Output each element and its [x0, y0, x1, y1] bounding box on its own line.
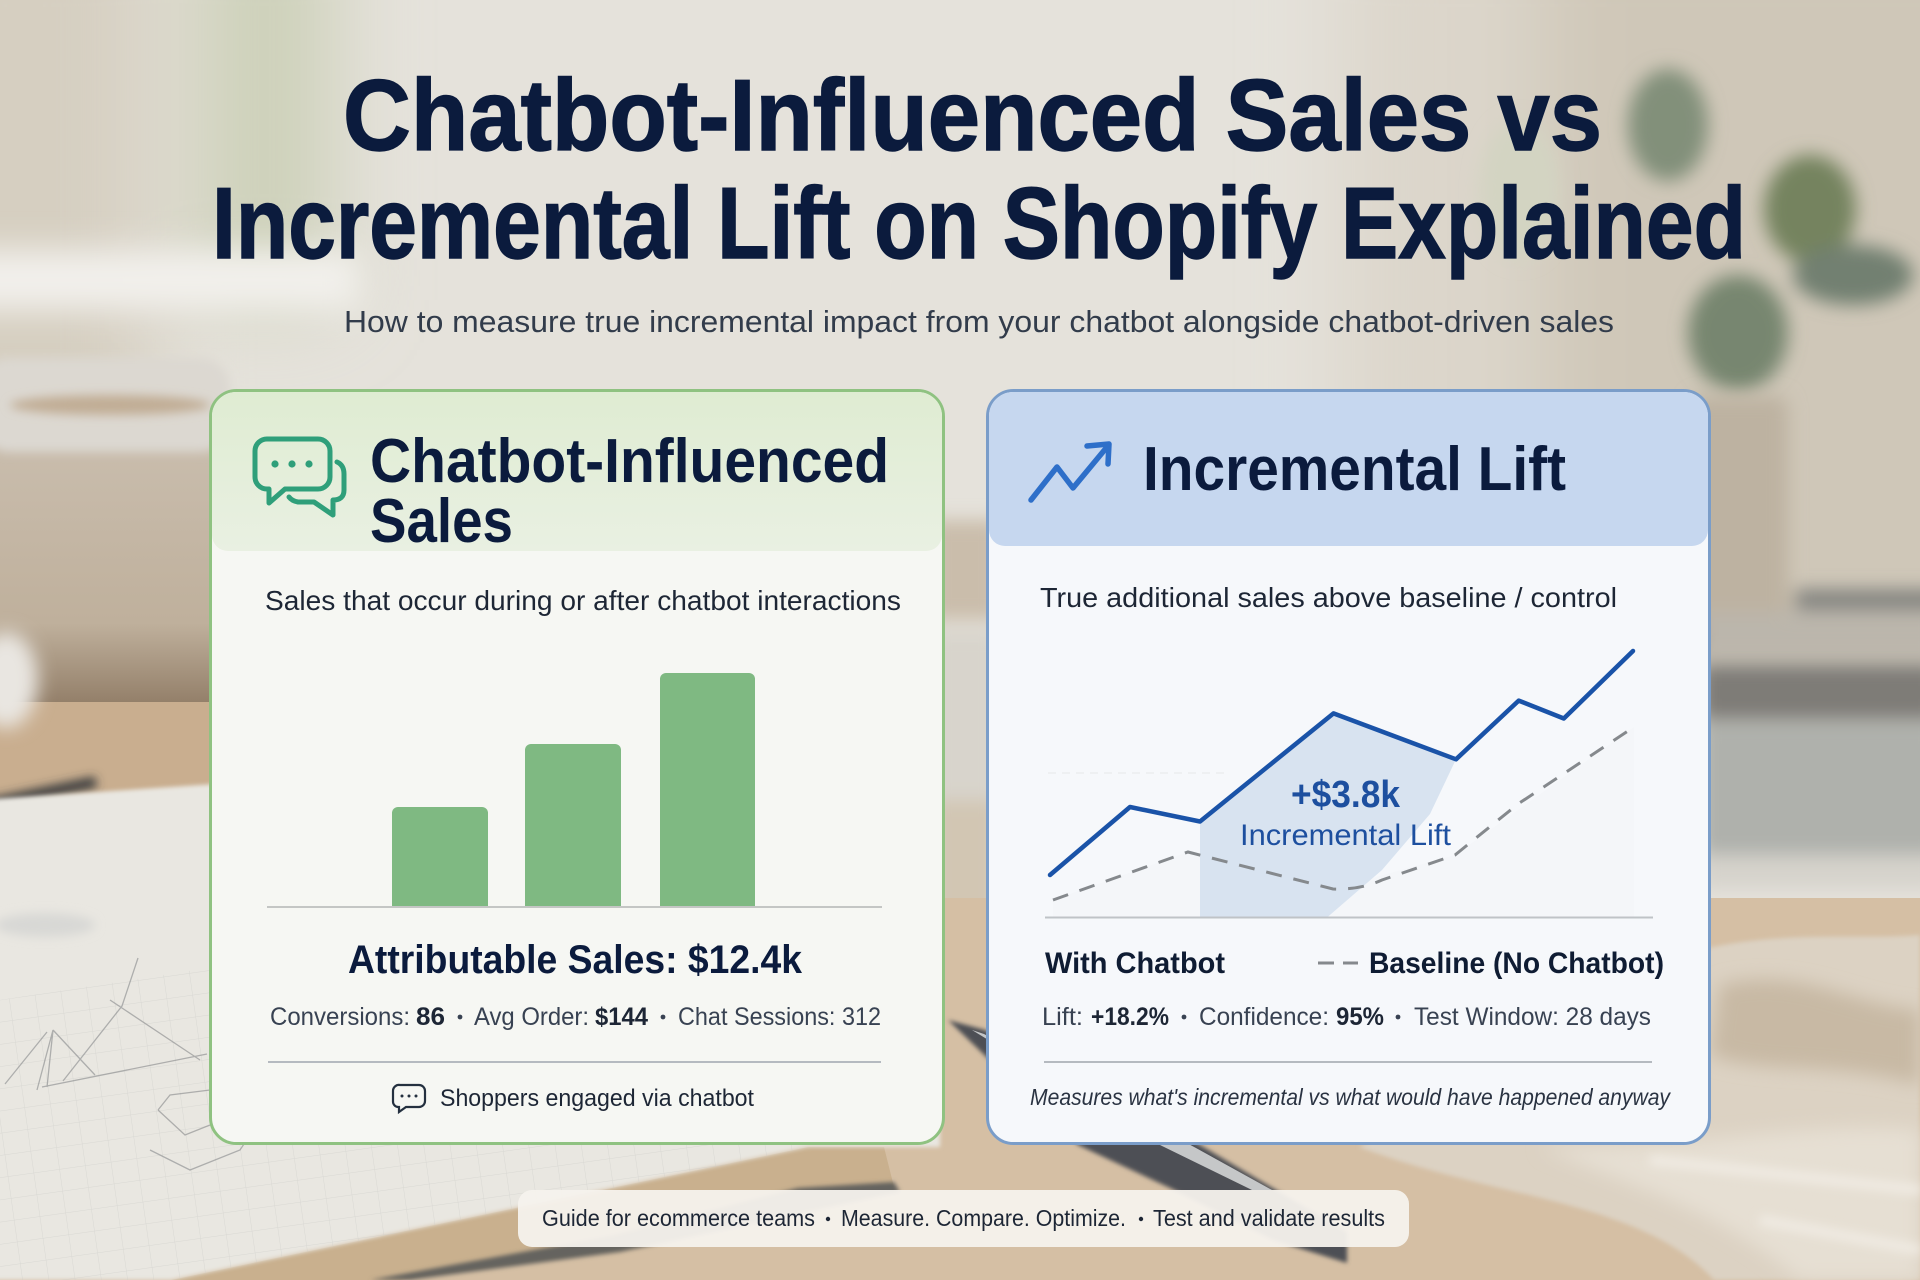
italic footnote: Measures what's incremental vs what would have happened anyway [1030, 1084, 1671, 1110]
stats row: Chat Sessions: 312 [678, 1003, 881, 1031]
bright window glare band [0, 250, 360, 310]
pill text: Guide for ecommerce teams [542, 1205, 815, 1231]
stats row [1042, 1003, 1651, 1031]
stats row: Lift: [1042, 1003, 1083, 1031]
pill text [542, 1205, 1385, 1231]
notebook sketch lines [5, 958, 260, 1170]
lift value label: +$3.8k [1291, 774, 1401, 816]
stats row: 86 [416, 1003, 445, 1031]
linen cloth [1359, 935, 1920, 1280]
icon: trending arrow [1031, 444, 1109, 500]
panel card [988, 390, 1710, 1144]
panel heading: Sales [370, 487, 513, 556]
wall light bands [0, 0, 1920, 700]
bar chart [267, 673, 882, 907]
desk surface [0, 898, 1920, 1280]
with chatbot line [1050, 651, 1633, 875]
panel description: True additional sales above baseline / control [1040, 582, 1617, 613]
lift caption: Incremental Lift [1240, 819, 1452, 852]
panel heading: Incremental Lift [1143, 435, 1566, 504]
panel header band [989, 392, 1708, 546]
icon: blurred coffee cup [0, 358, 230, 728]
baseline dashed line [1053, 727, 1634, 900]
notebook pages [0, 783, 940, 1280]
panel header band [212, 392, 942, 551]
title [212, 60, 1746, 280]
pot, laptop and desk bands [1690, 396, 1920, 889]
pill text: Test and validate results [1153, 1205, 1385, 1231]
legend: With Chatbot [1045, 947, 1225, 980]
panel: chatbot-influenced sales [210, 390, 944, 1144]
metric: attributable sales: Attributable Sales: $12.4k [348, 938, 803, 982]
panel heading [370, 427, 889, 556]
incremental lift area [1200, 713, 1456, 918]
axis [1045, 916, 1653, 918]
panel heading: Chatbot-Influenced [370, 427, 889, 496]
stats row: Test Window: 28 days [1414, 1003, 1651, 1031]
stats row: Conversions: [270, 1003, 410, 1031]
legend [1045, 947, 1664, 980]
faint chart underlay [1053, 727, 1634, 917]
gap tones between panels [930, 520, 1000, 920]
footer pill [518, 1190, 1409, 1247]
pen behind the panels [948, 1020, 1347, 1263]
stats row [270, 1003, 881, 1031]
stats row: $144 [595, 1003, 648, 1031]
stats row: Confidence: [1199, 1003, 1329, 1031]
panel card [210, 390, 944, 1144]
subtitle: How to measure true incremental impact from your chatbot alongside chatbot-driven sales [344, 304, 1614, 339]
stats row: 95% [1336, 1003, 1384, 1031]
title: Chatbot-Influenced Sales vs [343, 60, 1602, 172]
stats row: Avg Order: [474, 1003, 589, 1031]
stats row: +18.2% [1091, 1003, 1169, 1031]
pill text: Measure. Compare. Optimize. [841, 1205, 1126, 1231]
icon: blurred plant leaves [1480, 69, 1913, 391]
icon: chat bubbles [255, 439, 344, 515]
icon: blurred pen on desk [0, 782, 96, 804]
pill background [518, 1190, 1409, 1247]
line chart [1045, 651, 1653, 918]
footer note with chat icon: Shoppers engaged via chatbot [440, 1085, 754, 1112]
panel description: Sales that occur during or after chatbot interactions [265, 585, 901, 616]
panel: incremental lift [988, 390, 1710, 1144]
legend: Baseline (No Chatbot) [1369, 947, 1664, 980]
